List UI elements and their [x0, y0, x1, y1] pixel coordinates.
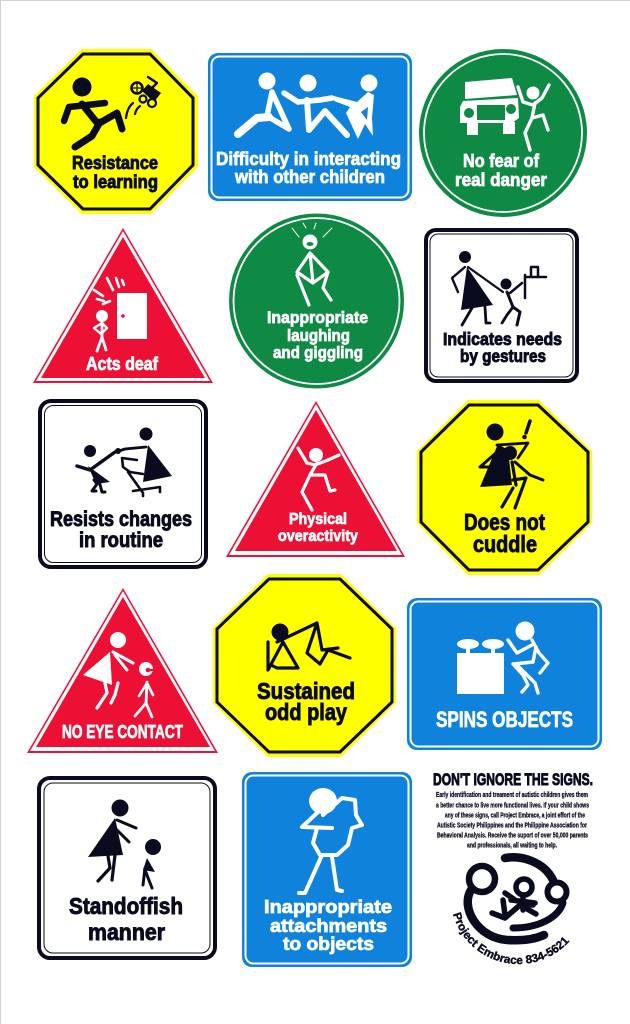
logo: Project Embrace: [452, 853, 570, 964]
call to action panel: [433, 770, 593, 964]
label: with other children: [234, 167, 385, 187]
sign: Does not cuddle: [417, 400, 592, 575]
sign: Sustained odd play: [213, 574, 396, 757]
body text: [436, 792, 589, 850]
sign: Indicates needs by gestures: [426, 230, 577, 381]
sign: Difficulty in interacting: [208, 53, 412, 201]
icon: three children: [238, 72, 378, 139]
icon: running child kicking a bicycle: [64, 77, 161, 147]
icon: child in odd play posture: [268, 623, 350, 670]
sign: Physical overactivity: [226, 401, 405, 557]
label: overactivity: [278, 528, 358, 545]
label: [278, 511, 358, 545]
label: Resistance: [72, 153, 158, 173]
label: manner: [88, 919, 165, 945]
icon: truck and dancing child: [460, 78, 549, 150]
label: [443, 329, 562, 366]
sign: Resistance to learning: [34, 49, 198, 214]
icon: child pulling mother towards shelf: [452, 251, 546, 325]
sign: Inappropriate attachments to objects: [242, 772, 412, 967]
sign: Standoffish manner: [39, 778, 215, 958]
label: to learning: [73, 172, 158, 192]
label: Inappropriate: [267, 308, 368, 327]
label: [69, 893, 183, 945]
sign: No fear of real danger: [419, 49, 587, 217]
label: [267, 308, 368, 362]
label: and giggling: [273, 343, 363, 362]
label: Difficulty in interacting: [216, 149, 401, 169]
label: Inappropriate: [264, 897, 392, 917]
label: attachments: [270, 916, 387, 936]
icon: child hugging object: [299, 788, 362, 893]
logo caption on curve: Project Embrace 834-5621: [452, 912, 570, 964]
label: NO EYE CONTACT: [62, 722, 183, 742]
label: Acts deaf: [86, 354, 159, 374]
sign: Resists changes in routine: [40, 401, 206, 567]
icon: laughing child: [292, 223, 332, 305]
sign: Acts deaf: [33, 228, 213, 383]
label: SPINS OBJECTS: [436, 707, 573, 732]
label: [257, 678, 355, 725]
sign: Inappropriate laughing and giggling: [229, 214, 404, 388]
icon: child spinning objects on a box: [457, 622, 548, 694]
label: to objects: [283, 934, 374, 954]
sign: No eye contact: [27, 588, 218, 753]
body text: and professionals, all waiting to help.: [467, 842, 557, 850]
icon: mother and child not cuddling: [480, 421, 543, 508]
label: [72, 153, 158, 192]
label: Resists changes: [50, 508, 192, 531]
label: [216, 149, 401, 187]
label: [455, 151, 547, 190]
icon: mother and distant child: [88, 800, 161, 888]
label: laughing: [287, 326, 350, 345]
label: No fear of: [463, 151, 540, 171]
label: [464, 509, 545, 557]
label: by gestures: [460, 346, 546, 366]
label: Does not: [464, 509, 545, 535]
label: cuddle: [473, 531, 537, 557]
label: in routine: [79, 529, 163, 552]
icon: door and child: [94, 278, 147, 351]
label: Standoffish: [69, 893, 183, 919]
label: odd play: [265, 699, 347, 725]
label: Indicates needs: [443, 329, 562, 349]
icon: mother and child avoiding eye contact: [83, 632, 154, 717]
label: real danger: [455, 170, 547, 190]
label: Sustained: [257, 678, 355, 704]
label: [50, 508, 192, 552]
sign: Spins objects: [407, 598, 602, 750]
label: Physical: [289, 511, 347, 528]
label: [264, 897, 392, 954]
icon: jumping child: [298, 448, 339, 510]
icon: child pushing mother's chair: [77, 428, 172, 496]
